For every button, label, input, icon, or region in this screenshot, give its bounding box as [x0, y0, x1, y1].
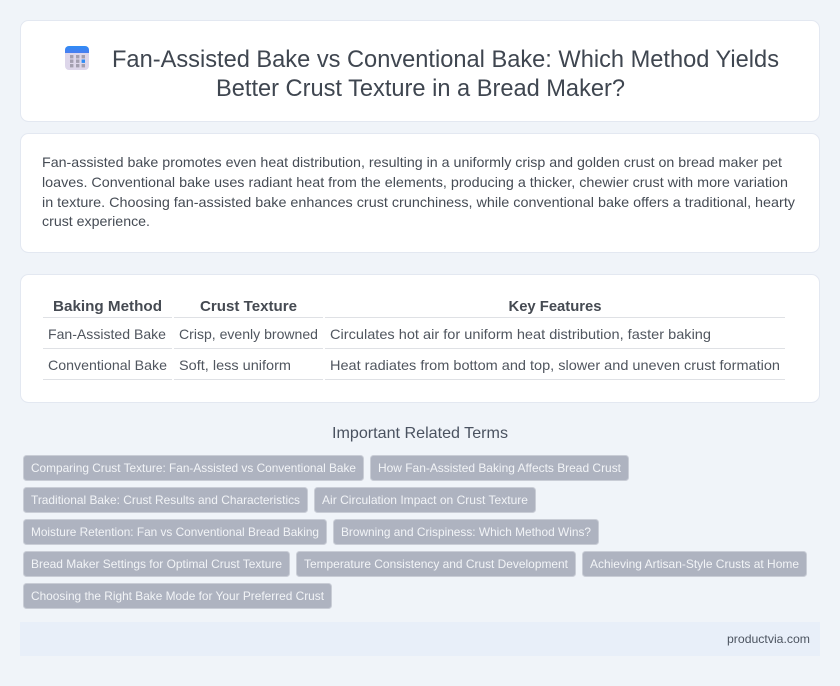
tag: Comparing Crust Texture: Fan-Assisted vs Conventional Bake [31, 461, 356, 475]
table row: fan-assisted bake: Circulates hot air for uniform heat distribution, faster baking [330, 326, 711, 342]
table row: conventional bake: Heat radiates from bottom and top, slower and uneven crust formation [330, 357, 780, 373]
icon: calendar [65, 46, 89, 70]
tag [296, 552, 576, 576]
footer [20, 622, 820, 656]
tag: How Fan-Assisted Baking Affects Bread Crust [378, 461, 622, 475]
title text [112, 46, 779, 102]
panel: title [20, 20, 820, 122]
tag: Air Circulation Impact on Crust Texture [322, 493, 528, 507]
tag [314, 488, 536, 512]
tag: Moisture Retention: Fan vs Conventional Bread Baking [31, 525, 319, 539]
tag [24, 584, 332, 608]
table row: conventional bake: Soft, less uniform [179, 357, 291, 373]
footer source: productvia.com [727, 632, 810, 646]
tag: Browning and Crispiness: Which Method Wins? [341, 525, 591, 539]
tag [334, 520, 598, 544]
table header: Baking Method [53, 298, 162, 315]
tag [24, 456, 364, 480]
tag: Choosing the Right Bake Mode for Your Preferred Crust [31, 589, 325, 603]
summary paragraph: loaves. Conventional bake uses radiant heat from the elements, producing a thicker, chewier crust with more variation [42, 174, 788, 190]
tag: Temperature Consistency and Crust Development [304, 557, 569, 571]
related term tags [24, 456, 806, 608]
table row: conventional bake [48, 357, 780, 373]
summary paragraph [42, 154, 795, 229]
tag [24, 552, 290, 576]
panel: comparison table [20, 274, 820, 402]
table header: Key Features [508, 298, 602, 315]
table row: fan-assisted bake: Fan-Assisted Bake [48, 326, 166, 342]
title text: Fan-Assisted Bake vs Conventional Bake: Which Method Yields [112, 46, 779, 73]
tag [24, 520, 326, 544]
summary paragraph: Fan-assisted bake promotes even heat distribution, resulting in a uniformly crisp and golden crust on bread maker pet [42, 154, 782, 170]
summary paragraph: in texture. Choosing fan-assisted bake enhances crust crunchiness, while conventional bake offers a traditional, hearty [42, 194, 795, 210]
table header [53, 298, 602, 315]
table row: fan-assisted bake: Crisp, evenly browned [179, 326, 318, 342]
table row: conventional bake: Conventional Bake [48, 357, 167, 373]
tag: Achieving Artisan-Style Crusts at Home [590, 557, 799, 571]
title text: Better Crust Texture in a Bread Maker? [216, 75, 625, 102]
summary paragraph: crust experience. [42, 213, 150, 229]
tag [582, 552, 806, 576]
table row: fan-assisted bake [48, 326, 711, 342]
heading: related terms: Important Related Terms [332, 425, 508, 442]
table header: Crust Texture [200, 298, 297, 315]
panel: summary [20, 134, 820, 252]
tag [24, 488, 308, 512]
tag: Traditional Bake: Crust Results and Characteristics [31, 493, 300, 507]
tag: Bread Maker Settings for Optimal Crust Texture [31, 557, 282, 571]
tag [370, 456, 628, 480]
